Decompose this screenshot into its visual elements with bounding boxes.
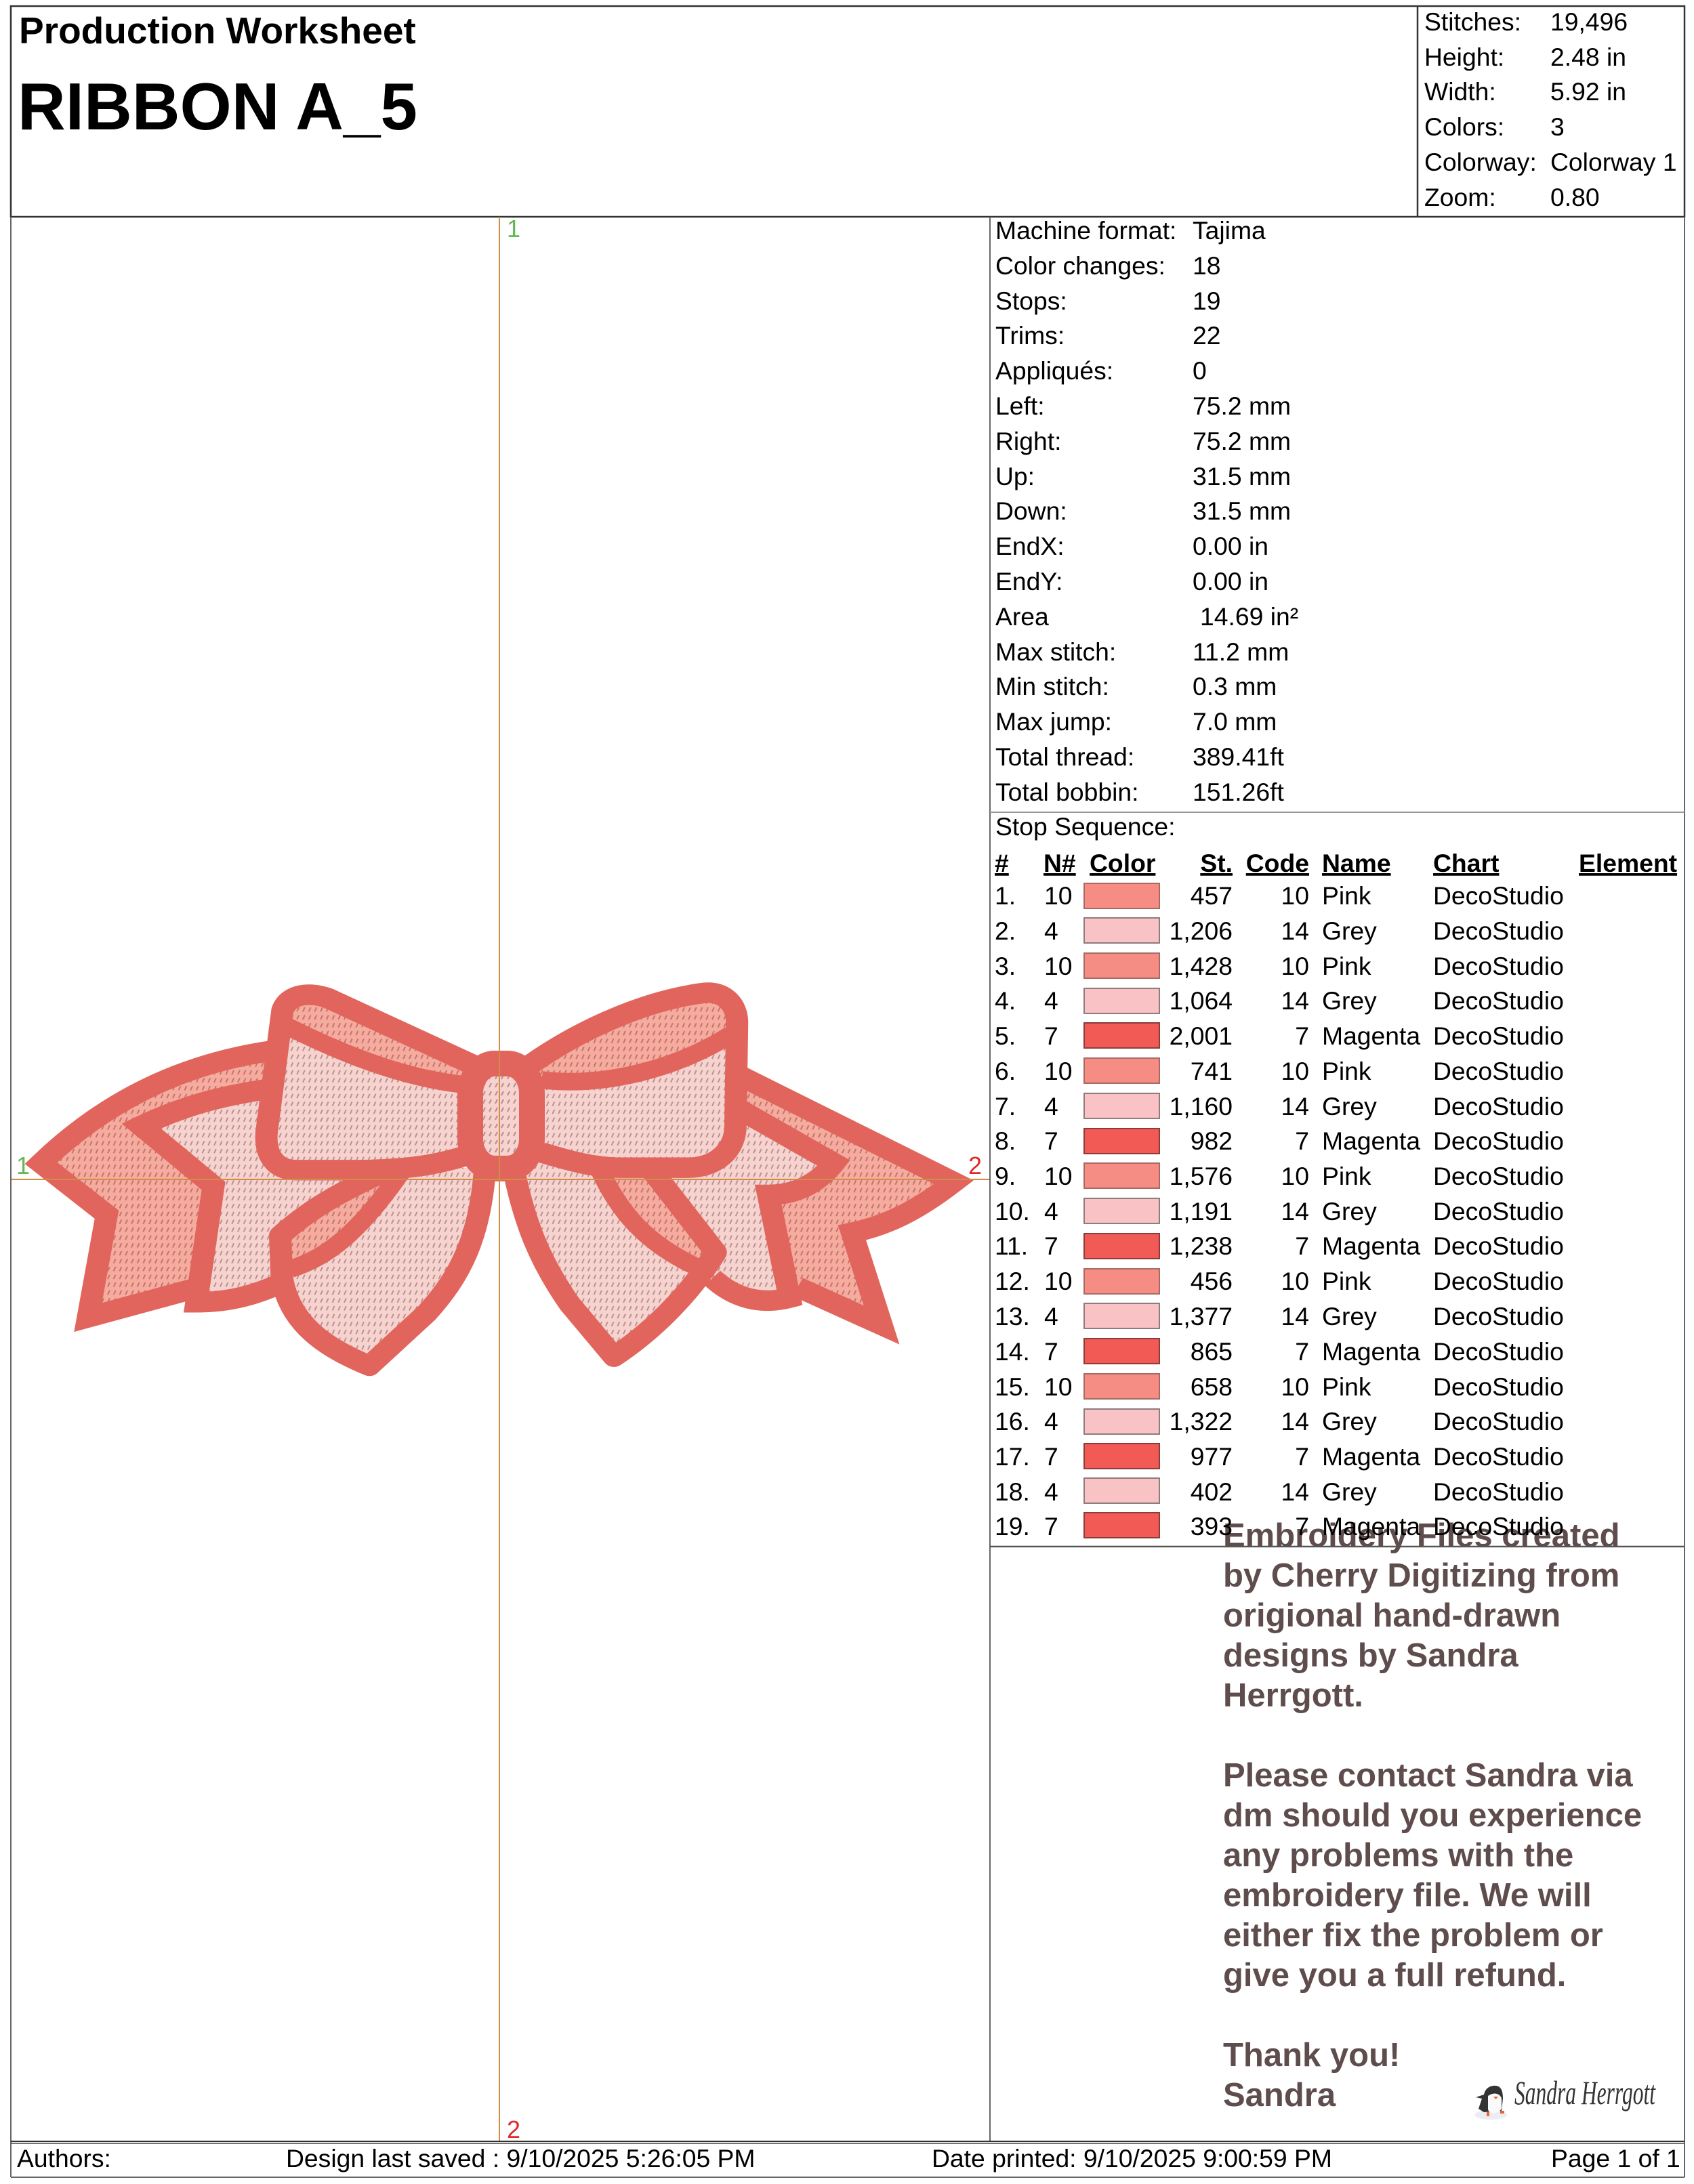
crosshair axes and markers: 2: [507, 2116, 520, 2143]
table rows: Grey: [1322, 1407, 1377, 1435]
machine statistics list: Total thread:: [995, 742, 1134, 771]
table title: Stop Sequence:: [995, 812, 1175, 841]
table rows: 15.: [995, 1372, 1030, 1401]
right half of bow: [512, 992, 954, 1357]
note from the designer: designs by Sandra: [1223, 1637, 1519, 1674]
table rows: 7: [1044, 1022, 1058, 1050]
stats box: design summary: [1418, 6, 1677, 217]
table rows: DecoStudio: [1433, 1477, 1564, 1506]
table rows: 4: [1044, 1092, 1058, 1120]
table rows: 982: [1191, 1127, 1233, 1155]
table rows: 1,191: [1170, 1197, 1233, 1225]
table header row: #: [995, 849, 1009, 877]
table rows: 14: [1281, 1302, 1309, 1330]
note from the designer: origional hand-drawn: [1223, 1597, 1561, 1634]
stats box: design summary: Height:: [1424, 43, 1504, 71]
table rows: Magenta: [1322, 1127, 1420, 1155]
machine statistics list: Max jump:: [995, 707, 1112, 736]
machine statistics list: Total bobbin:: [995, 778, 1139, 806]
footer bar: Date printed: 9/10/2025 9:00:59 PM: [932, 2144, 1332, 2172]
table rows: Magenta: [1322, 1022, 1420, 1050]
table rows: 4: [1044, 986, 1058, 1015]
table rows: 402: [1191, 1477, 1233, 1506]
table rows: 7: [1295, 1442, 1309, 1471]
embroidery bow illustration: [41, 992, 954, 1366]
table rows: 14: [1281, 1407, 1309, 1435]
right back ribbon tail: [727, 1070, 954, 1325]
table rows: 14: [1281, 1477, 1309, 1506]
machine statistics list: 31.5 mm: [1193, 462, 1291, 490]
table rows: 1,160: [1170, 1092, 1233, 1120]
machine statistics list: Max stitch:: [995, 637, 1116, 666]
machine statistics list: 11.2 mm: [1193, 637, 1289, 666]
table rows: 10: [1044, 881, 1072, 910]
stats box: design summary: 5.92 in: [1550, 77, 1626, 106]
table rows: 7: [1295, 1232, 1309, 1260]
note from the designer: Embroidery Files created: [1223, 1517, 1620, 1554]
right middle ribbon tail: [658, 1104, 834, 1301]
machine statistics list: Up:: [995, 462, 1035, 490]
table rows: 4: [1044, 1477, 1058, 1506]
table rows: 1,064: [1170, 986, 1233, 1015]
table rows: 7: [1295, 1127, 1309, 1155]
table rows: DecoStudio: [1433, 917, 1564, 945]
machine statistics list: 0.3 mm: [1193, 672, 1277, 700]
note from the designer: dm should you experience: [1223, 1797, 1642, 1834]
table rows: 14: [1281, 1092, 1309, 1120]
left back ribbon tail: [41, 1050, 279, 1318]
machine statistics list: Color changes:: [995, 251, 1165, 280]
table rows: 977: [1191, 1442, 1233, 1471]
table rows: 4: [1044, 1407, 1058, 1435]
note from the designer: Sandra: [1223, 2077, 1336, 2114]
table rows: 10: [1281, 1057, 1309, 1085]
table rows: Pink: [1322, 1372, 1371, 1401]
table rows: 11.: [995, 1232, 1028, 1260]
machine statistics list: Area: [995, 602, 1049, 631]
table rows: 14: [1281, 1197, 1309, 1225]
table rows: DecoStudio: [1433, 1267, 1564, 1295]
table header row: Name: [1322, 849, 1391, 877]
table rows: DecoStudio: [1433, 881, 1564, 910]
crosshair axes and markers: 1: [507, 215, 520, 243]
left middle ribbon tail: [141, 1089, 345, 1302]
table rows: DecoStudio: [1433, 1197, 1564, 1225]
note from the designer: any problems with the: [1223, 1837, 1573, 1874]
table rows: DecoStudio: [1433, 1407, 1564, 1435]
table rows: 7: [1295, 1512, 1309, 1540]
table rows: 10: [1044, 1267, 1072, 1295]
stats box: design summary: Zoom:: [1424, 183, 1496, 211]
machine statistics list: Down:: [995, 497, 1067, 525]
table rows: DecoStudio: [1433, 986, 1564, 1015]
stats box: design summary: Colorway 1: [1550, 148, 1677, 176]
note from the designer: either fix the problem or: [1223, 1917, 1603, 1954]
table rows: 18.: [995, 1477, 1030, 1506]
table rows: Grey: [1322, 917, 1377, 945]
footer bar: [11, 2141, 1685, 2177]
table rows: 10: [1281, 1267, 1309, 1295]
table rows: Grey: [1322, 1092, 1377, 1120]
table rows: 10: [1044, 952, 1072, 980]
table rows: 10: [1281, 1372, 1309, 1401]
table rows: Magenta: [1322, 1337, 1420, 1366]
stats box: design summary: Colors:: [1424, 112, 1504, 141]
table rows: Pink: [1322, 1162, 1371, 1190]
table rows: 3.: [995, 952, 1016, 980]
table rows: 457: [1191, 881, 1233, 910]
machine statistics list: 31.5 mm: [1193, 497, 1291, 525]
table rows: 10: [1044, 1372, 1072, 1401]
table rows: 14.: [995, 1337, 1030, 1366]
stats box: design summary: Stitches:: [1424, 7, 1521, 36]
table rows: Grey: [1322, 1197, 1377, 1225]
table rows: Grey: [1322, 1302, 1377, 1330]
table rows: 393: [1191, 1512, 1233, 1540]
note from the designer: [1223, 1517, 1642, 2114]
note from the designer: Herrgott.: [1223, 1677, 1363, 1714]
crosshair axes and markers: 1: [16, 1152, 30, 1179]
crosshair axes and markers: 2: [968, 1152, 982, 1179]
table rows: 6.: [995, 1057, 1016, 1085]
table rows: 4: [1044, 1197, 1058, 1225]
table header row: Color: [1090, 849, 1155, 877]
table rows: 7: [1044, 1512, 1058, 1540]
table rows: 2,001: [1170, 1022, 1233, 1050]
crosshair axes and markers: [11, 215, 990, 2143]
machine statistics list: Stops:: [995, 287, 1067, 315]
table rows: [995, 881, 1564, 1540]
stats box: design summary: Width:: [1424, 77, 1496, 106]
table header row: Chart: [1433, 849, 1499, 877]
stats box: design summary: 2.48 in: [1550, 43, 1626, 71]
table rows: DecoStudio: [1433, 1092, 1564, 1120]
machine statistics list: Right:: [995, 427, 1061, 455]
table rows: DecoStudio: [1433, 1442, 1564, 1471]
machine statistics list: 14.69 in²: [1200, 602, 1298, 631]
note from the designer: by Cherry Digitizing from: [1223, 1557, 1619, 1594]
table rows: 1,428: [1170, 952, 1233, 980]
table rows: 10: [1281, 952, 1309, 980]
table rows: 16.: [995, 1407, 1030, 1435]
table rows: 1,576: [1170, 1162, 1233, 1190]
table rows: 10: [1044, 1162, 1072, 1190]
table rows: Magenta: [1322, 1442, 1420, 1471]
footer bar: Design last saved : 9/10/2025 5:26:05 PM: [286, 2144, 756, 2172]
table rows: 7: [1044, 1442, 1058, 1471]
table rows: 1.: [995, 881, 1016, 910]
table rows: 7: [1295, 1022, 1309, 1050]
table rows: 14: [1281, 917, 1309, 945]
table rows: 4: [1044, 917, 1058, 945]
machine statistics list: Appliqués:: [995, 356, 1113, 385]
table rows: 14: [1281, 986, 1309, 1015]
table rows: DecoStudio: [1433, 1057, 1564, 1085]
signature logo with penguin: [1474, 2074, 1656, 2120]
table rows: 7: [1295, 1337, 1309, 1366]
table rows: 17.: [995, 1442, 1030, 1471]
table rows: 8.: [995, 1127, 1016, 1155]
table rows: 13.: [995, 1302, 1030, 1330]
table rows: 1,206: [1170, 917, 1233, 945]
table rows: Magenta: [1322, 1232, 1420, 1260]
machine statistics list: 7.0 mm: [1193, 707, 1277, 736]
header panel: [11, 6, 1685, 217]
left lower loop: [280, 1168, 485, 1366]
table rows: 1,322: [1170, 1407, 1233, 1435]
footer bar: Authors:: [17, 2144, 111, 2172]
machine statistics list: 18: [1193, 251, 1221, 280]
table rows: 2.: [995, 917, 1016, 945]
machine statistics list: 19: [1193, 287, 1221, 315]
table rows: 5.: [995, 1022, 1016, 1050]
machine statistics list: Min stitch:: [995, 672, 1109, 700]
bow centre knot: [470, 1064, 532, 1169]
table rows: DecoStudio: [1433, 1337, 1564, 1366]
table rows: Pink: [1322, 881, 1371, 910]
table header row: [995, 849, 1677, 877]
machine statistics list: 75.2 mm: [1193, 427, 1291, 455]
stats box: design summary: 3: [1550, 112, 1565, 141]
table header row: St.: [1200, 849, 1233, 877]
icon: penguin: [1474, 2086, 1507, 2120]
machine statistics list: EndX:: [995, 532, 1065, 560]
table rows: DecoStudio: [1433, 1162, 1564, 1190]
table rows: Pink: [1322, 1057, 1371, 1085]
table rows: DecoStudio: [1433, 1302, 1564, 1330]
table header row: Code: [1246, 849, 1309, 877]
note from the designer: embroidery file. We will: [1223, 1877, 1592, 1914]
table rows: DecoStudio: [1433, 1372, 1564, 1401]
table rows: 741: [1191, 1057, 1233, 1085]
table rows: 7: [1044, 1232, 1058, 1260]
table rows: 10: [1044, 1057, 1072, 1085]
machine statistics list: Trims:: [995, 321, 1065, 350]
machine statistics list: 0: [1193, 356, 1207, 385]
note from the designer: give you a full refund.: [1223, 1957, 1566, 1994]
stats box: design summary: 19,496: [1550, 7, 1628, 36]
note from the designer: Please contact Sandra via: [1223, 1757, 1633, 1794]
table rows: 7.: [995, 1092, 1016, 1120]
machine statistics list: Left:: [995, 392, 1045, 420]
machine statistics list: 0.00 in: [1193, 532, 1268, 560]
machine statistics list: 0.00 in: [1193, 567, 1268, 595]
table rows: 1,377: [1170, 1302, 1233, 1330]
heading: production worksheet: Production Worksheet: [19, 9, 416, 51]
title: design name: RIBBON A_5: [18, 69, 417, 144]
machine statistics list: 22: [1193, 321, 1221, 350]
table rows: DecoStudio: [1433, 1022, 1564, 1050]
table rows: 456: [1191, 1267, 1233, 1295]
machine statistics list: 75.2 mm: [1193, 392, 1291, 420]
left half of bow: [41, 994, 485, 1366]
table rows: 7: [1044, 1127, 1058, 1155]
right lower loop: [512, 1162, 716, 1357]
stop sequence table: [995, 812, 1677, 1540]
table rows: 10.: [995, 1197, 1030, 1225]
machine statistics list: 151.26ft: [1193, 778, 1284, 806]
table rows: 12.: [995, 1267, 1030, 1295]
table rows: DecoStudio: [1433, 952, 1564, 980]
table rows: DecoStudio: [1433, 1512, 1564, 1540]
machine statistics list: Machine format:: [995, 216, 1176, 245]
table header row: Element: [1579, 849, 1677, 877]
left upper loop: [266, 994, 473, 1170]
table rows: 7: [1044, 1337, 1058, 1366]
table rows: 10: [1281, 881, 1309, 910]
table rows: DecoStudio: [1433, 1127, 1564, 1155]
table rows: 9.: [995, 1162, 1016, 1190]
table rows: Pink: [1322, 1267, 1371, 1295]
table rows: Grey: [1322, 986, 1377, 1015]
table rows: 10: [1281, 1162, 1309, 1190]
table rows: Magenta: [1322, 1512, 1420, 1540]
table rows: 19.: [995, 1512, 1030, 1540]
machine statistics list: 389.41ft: [1193, 742, 1284, 771]
table rows: DecoStudio: [1433, 1232, 1564, 1260]
table rows: 1,238: [1170, 1232, 1233, 1260]
table rows: Grey: [1322, 1477, 1377, 1506]
machine statistics list: Tajima: [1193, 216, 1266, 245]
machine statistics list: EndY:: [995, 567, 1063, 595]
stats box: design summary: Colorway:: [1424, 148, 1537, 176]
machine statistics list: [995, 216, 1298, 806]
footer bar: Page 1 of 1: [1551, 2144, 1680, 2172]
table rows: 658: [1191, 1372, 1233, 1401]
table header row: N#: [1044, 849, 1076, 877]
table rows: 4.: [995, 986, 1016, 1015]
table rows: 4: [1044, 1302, 1058, 1330]
table rows: 865: [1191, 1337, 1233, 1366]
table rows: Pink: [1322, 952, 1371, 980]
right upper loop: [530, 992, 737, 1168]
note from the designer: Thank you!: [1223, 2037, 1400, 2074]
stats box: design summary: 0.80: [1550, 183, 1600, 211]
